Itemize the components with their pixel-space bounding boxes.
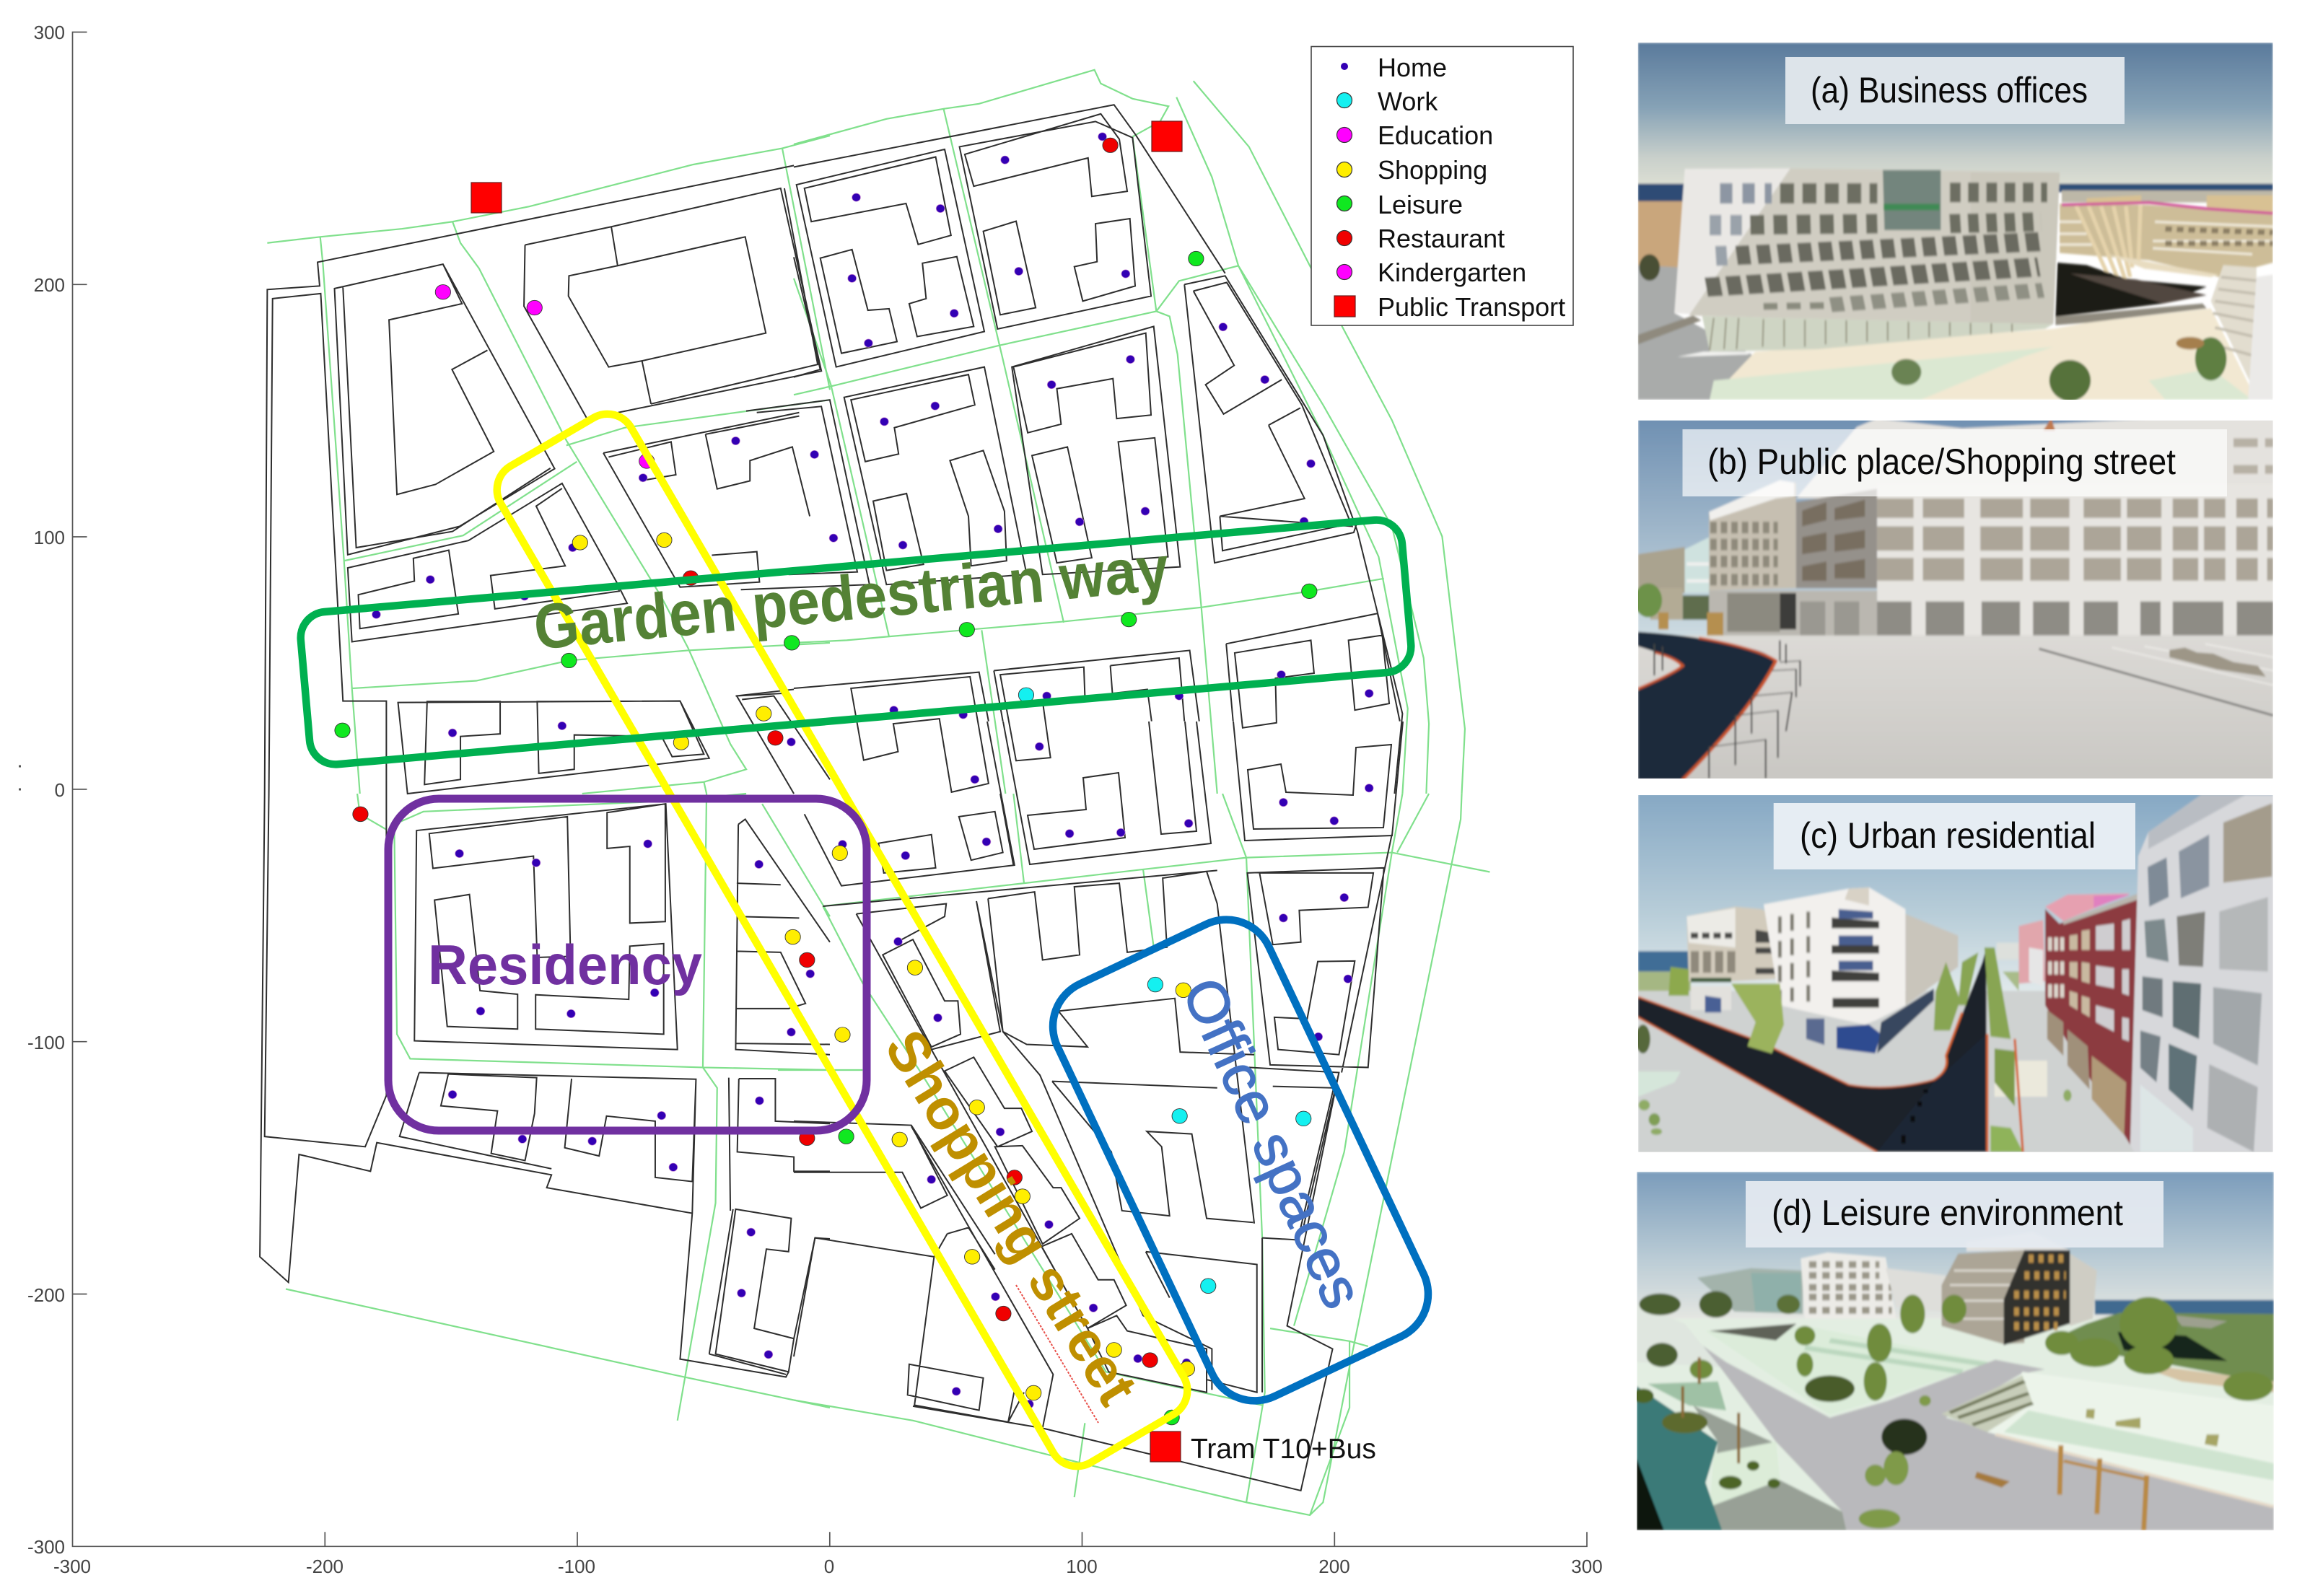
highlight: residency zone bbox=[388, 799, 867, 1131]
chart axes bbox=[19, 22, 1603, 1577]
legend: shopping: Shopping bbox=[1378, 155, 1487, 185]
photo: business offices bbox=[1638, 43, 2273, 401]
y axis labels: -200 bbox=[27, 1284, 65, 1306]
y axis labels: 200 bbox=[34, 274, 65, 296]
stop label: tram: Tram T10+Bus bbox=[1191, 1434, 1376, 1465]
x axis labels: 100 bbox=[1066, 1556, 1098, 1577]
y axis labels: -100 bbox=[27, 1032, 65, 1053]
caption box: business offices bbox=[1785, 57, 2125, 124]
y axis labels: -300 bbox=[27, 1536, 65, 1558]
markers: leisure bbox=[335, 251, 1317, 1425]
caption box: urban residential: (c) Urban residential bbox=[1800, 815, 2096, 856]
label: shopping street: Shopping street bbox=[873, 1019, 1150, 1416]
legend: leisure bbox=[1336, 190, 1463, 219]
photo: urban residential bbox=[1636, 794, 2273, 1154]
legend: restaurant: Restaurant bbox=[1378, 224, 1505, 253]
legend: kindergarten: Kindergarten bbox=[1378, 258, 1526, 287]
label: garden pedestrian way: Garden pedestrian way bbox=[530, 532, 1172, 663]
stray tick marks at the left margin bbox=[19, 766, 21, 789]
y axis labels bbox=[27, 22, 65, 1558]
caption box: urban residential bbox=[1774, 803, 2135, 869]
legend: public transport: Public Transport bbox=[1378, 292, 1565, 322]
x axis labels: 200 bbox=[1318, 1556, 1350, 1577]
y axis labels: 300 bbox=[34, 22, 65, 43]
x axis labels bbox=[53, 1556, 1603, 1577]
highlight: garden pedestrian way zone bbox=[299, 518, 1413, 766]
label: residency: Residency bbox=[428, 933, 702, 996]
legend bbox=[1311, 46, 1573, 325]
legend: work: Work bbox=[1378, 87, 1438, 116]
markers: work bbox=[1018, 688, 1311, 1294]
photo: leisure environment bbox=[1633, 1172, 2274, 1530]
map: building and block outlines (black lines) bbox=[260, 105, 1403, 1491]
y axis labels: 0 bbox=[55, 779, 65, 801]
caption box: business offices: (a) Business offices bbox=[1811, 70, 2088, 110]
legend: education: Education bbox=[1378, 120, 1493, 150]
legend: home: Home bbox=[1378, 53, 1447, 82]
legend: work bbox=[1336, 87, 1438, 116]
markers: public transport stops bbox=[471, 121, 1182, 1462]
map: pedestrian network (green lines) bbox=[267, 70, 1489, 1515]
x axis labels: -300 bbox=[53, 1556, 91, 1577]
photo: public place / shopping street bbox=[1635, 418, 2273, 780]
legend: leisure: Leisure bbox=[1378, 190, 1463, 219]
caption box: public place / shopping street: (b) Public place/Shopping street bbox=[1707, 442, 2176, 482]
legend: home bbox=[1341, 53, 1447, 82]
label: office spaces: Office spaces bbox=[1171, 968, 1375, 1317]
markers: shopping bbox=[572, 532, 1195, 1400]
x axis labels: -100 bbox=[558, 1556, 595, 1577]
caption box: public place / shopping street bbox=[1683, 429, 2227, 496]
markers: home locations bbox=[372, 133, 1373, 1408]
markers: education and kindergarten bbox=[435, 285, 655, 468]
highlight: shopping street zone bbox=[487, 404, 1197, 1476]
caption box: leisure environment bbox=[1746, 1181, 2163, 1248]
x axis labels: -200 bbox=[306, 1556, 344, 1577]
x axis labels: 300 bbox=[1571, 1556, 1603, 1577]
caption box: leisure environment: (d) Leisure environment bbox=[1772, 1193, 2123, 1233]
x axis labels: 0 bbox=[824, 1556, 834, 1577]
markers: restaurant bbox=[353, 138, 1158, 1367]
y axis labels: 100 bbox=[34, 527, 65, 548]
highlight: office spaces zone bbox=[1037, 904, 1444, 1416]
